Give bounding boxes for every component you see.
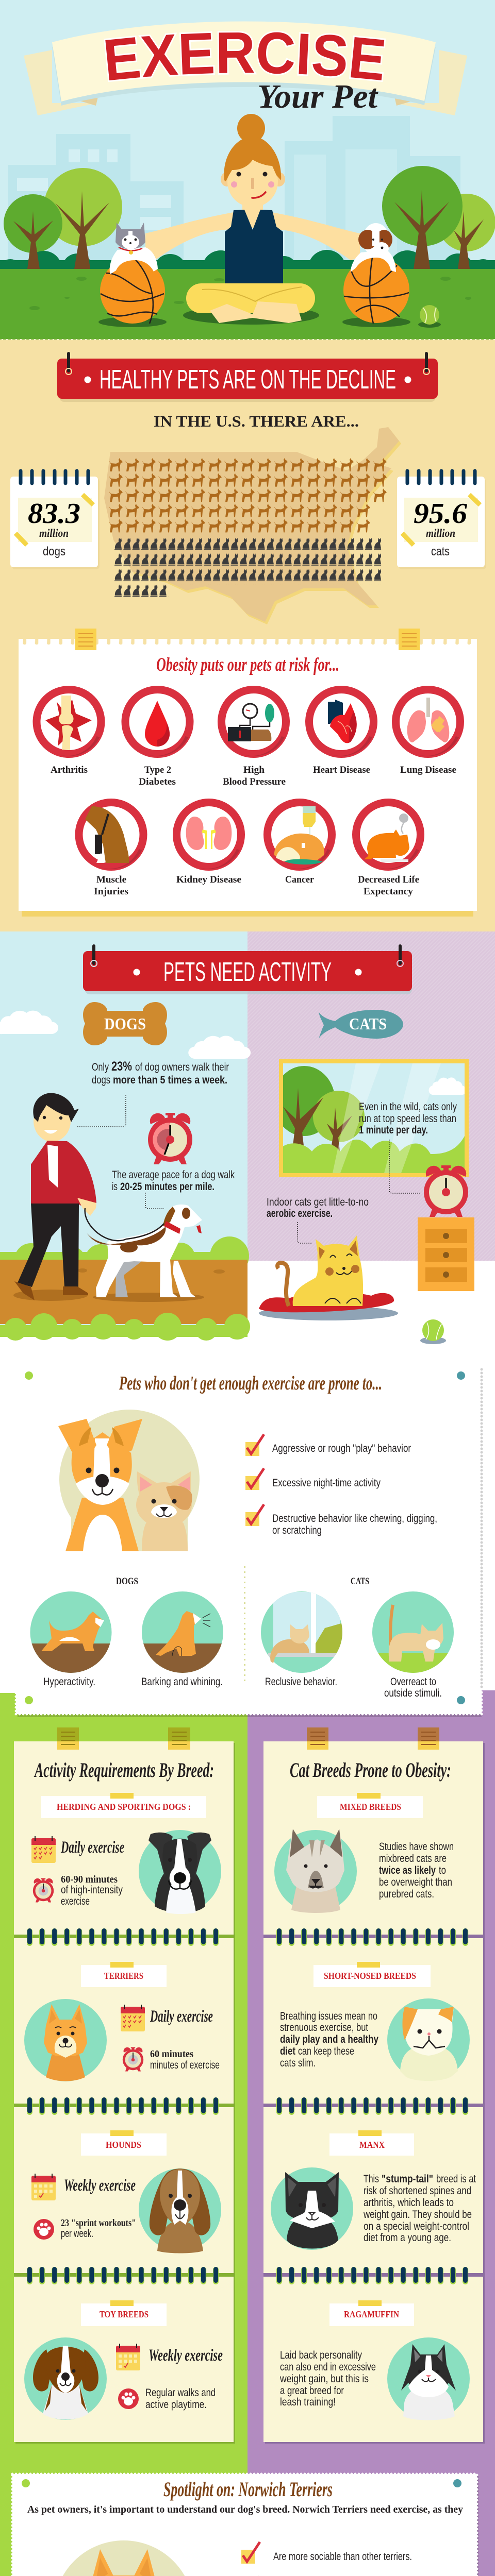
banner: pets need activity: [83, 944, 412, 994]
note: cats count: [397, 471, 486, 569]
trees: [0, 166, 495, 288]
cat pictogram grid: [114, 538, 383, 600]
stat: dog walking: more than 5 times a week.: [113, 1074, 227, 1086]
spiral divider: [263, 2267, 483, 2284]
risk: high blood pressure: Blood Pressure: [223, 776, 286, 787]
risk: decreased life expectancy: Decreased Life: [358, 874, 419, 885]
risk: diabetes: [125, 689, 190, 787]
bone label: dogs: DOGS: [104, 1014, 146, 1033]
stat: walk pace: [112, 1169, 235, 1193]
window with trees: [273, 1061, 467, 1175]
behaviour: overreact: [371, 1591, 456, 1699]
checklist: norwich traits: Are more sociable than other terriers.: [273, 2551, 412, 2563]
behaviour: overreact: outside stimuli.: [384, 1687, 442, 1699]
breed: toy breeds: active playtime.: [145, 2399, 207, 2411]
title: EXERCISE: [104, 31, 386, 82]
walking dog: [85, 1205, 202, 1297]
left basketball with cat: [98, 223, 167, 327]
dog and cat portrait: [58, 1410, 200, 1551]
ground: [0, 269, 495, 339]
heading: IN THE U.S. THERE ARE...: [154, 412, 359, 430]
title: [104, 31, 386, 82]
risk: diabetes: Diabetes: [139, 776, 176, 787]
intro text: As pet owners, it's important to understand our dog's breed. Norwich Terriers need exercise, as they: [27, 2504, 463, 2515]
risk: muscle injuries: [79, 803, 143, 897]
right basketball with dog: [342, 223, 410, 327]
stat: cats in wild: run at top speed less than: [359, 1113, 456, 1125]
breed: short-nosed breeds: cats slim.: [280, 2057, 316, 2069]
spiral divider: [14, 1928, 234, 1946]
breed: mixed breeds: mixbreed cats are: [379, 1853, 447, 1865]
risk: cancer: Cancer: [285, 874, 315, 885]
behaviour: hyperactivity: [30, 1591, 112, 1688]
breed: ragamuffin: weight gain, but this is: [279, 2373, 369, 2385]
breed: ragamuffin: leash training!: [280, 2396, 336, 2408]
checklist: behaviours: Excessive night-time activity: [272, 1477, 381, 1489]
panel heading: Obesity puts our pets at risk for...: [156, 654, 339, 675]
behaviour: barking: Barking and whining.: [141, 1676, 223, 1688]
checklist: behaviours: or scratching: [272, 1524, 322, 1536]
breed: toy breeds: Regular walks and: [145, 2387, 216, 2399]
risk: arthritis: [37, 689, 101, 775]
norwich terrier portrait: [54, 2540, 194, 2576]
spiral divider: [14, 2267, 234, 2284]
risk: heart disease: [309, 689, 373, 775]
risk: kidney disease: [176, 803, 241, 885]
breed: hounds: [31, 2130, 221, 2253]
section: healthy pets: [0, 340, 495, 931]
behaviour: reclusive: Reclusive behavior.: [265, 1676, 337, 1688]
tapes: [307, 1727, 439, 1750]
breed: toy breeds: Weekly exercise: [148, 2346, 223, 2365]
breed: manx: [271, 2130, 476, 2250]
breed: manx: on a special weight-control: [364, 2221, 469, 2232]
breed: manx: diet from a young age.: [364, 2232, 451, 2244]
note: dogs count: [10, 471, 100, 569]
stat: dog walking: dogs: [92, 1074, 110, 1086]
clock: cat speed: [424, 1165, 468, 1217]
section: hero: [0, 0, 495, 340]
breed: short-nosed breeds: diet: [280, 2045, 295, 2057]
note: cats count: cats: [431, 545, 450, 558]
label: cats: CATS: [351, 1576, 369, 1587]
panel: prone behaviours: [16, 1365, 482, 1717]
breed: ragamuffin: a great breed for: [280, 2385, 344, 2397]
breed: ragamuffin: Laid back personality: [280, 2349, 362, 2361]
breed: terriers: minutes of exercise: [150, 2059, 220, 2071]
breed: mixed breeds: purebred cats.: [379, 1888, 434, 1900]
breed: short-nosed breeds: strenuous exercise, but: [280, 2022, 368, 2033]
breed: short-nosed breeds: daily play and a healthy: [280, 2033, 378, 2045]
banner: pets need activity: PETS NEED ACTIVITY: [163, 957, 332, 987]
breed: mixed breeds: be overweight than: [379, 1876, 452, 1888]
clouds: [0, 1011, 251, 1059]
breed: manx: weight gain. They should be: [363, 2209, 472, 2221]
yellow cat on cushion: [259, 1235, 398, 1320]
breed: herding and sporting dogs: exercise: [61, 1895, 90, 1907]
risk: lung disease: [396, 689, 460, 775]
breed: terriers: TERRIERS: [104, 1971, 143, 1981]
section: breed backgrounds: [0, 1690, 495, 2576]
breed: terriers: Daily exercise: [150, 2007, 213, 2026]
breed: herding and sporting dogs: Daily exercise: [60, 1838, 124, 1857]
breed: manx: breed is at: [436, 2173, 476, 2185]
panel: activity requirements by breed: [14, 1727, 235, 2444]
stat: cats in wild: 1 minute per day.: [359, 1124, 428, 1136]
checklist: behaviours: Aggressive or rough "play" behavior: [272, 1443, 411, 1454]
breed: manx: MANX: [359, 2140, 385, 2150]
stat: walk pace: is: [112, 1181, 118, 1193]
stat: dog walking: Only: [92, 1061, 109, 1073]
behaviour: overreact: Overreact to: [390, 1676, 436, 1688]
note: cats count: 95.6: [414, 498, 467, 530]
stat: walk pace: The average pace for a dog walk: [112, 1169, 235, 1181]
risk: decreased life expectancy: [356, 803, 421, 897]
risk: muscle injuries: Muscle: [96, 874, 126, 885]
subtitle: Your Pet: [257, 78, 378, 115]
risk: muscle injuries: Injuries: [94, 886, 128, 897]
dog on ball: [351, 223, 396, 272]
stat: cats in wild: Even in the wild, cats only: [359, 1101, 457, 1113]
panel: cat breeds prone to obesity: [263, 1727, 485, 2444]
tapes: [57, 1727, 190, 1750]
breed: terriers: 60 minutes: [150, 2048, 193, 2060]
breed: herding and sporting dogs: HERDING AND SPORTING DOGS :: [57, 1802, 191, 1812]
label: dogs: DOGS: [116, 1576, 138, 1587]
breed: short-nosed breeds: can keep these: [298, 2045, 354, 2057]
breed: mixed breeds: to: [439, 1865, 446, 1876]
breed: mixed breeds: twice as likely: [379, 1865, 436, 1876]
breed: ragamuffin: RAGAMUFFIN: [344, 2309, 399, 2319]
breed: hounds: per week.: [61, 2228, 93, 2240]
behaviour: barking: [141, 1591, 224, 1688]
woman sitting: [145, 114, 360, 325]
dog pictogram grid: [109, 458, 389, 534]
breed: manx: "stump-tail": [382, 2173, 433, 2185]
breed: mixed breeds: Studies have shown: [379, 1841, 454, 1853]
panel: obesity risks: [19, 629, 477, 917]
breed: mixed breeds: [274, 1793, 454, 1913]
stat: indoor cats: aerobic exercise.: [267, 1208, 333, 1219]
section: pets need activity: [0, 931, 495, 1374]
fish label: cats: [319, 1010, 403, 1039]
panel: spotlight on norwich terriers: [12, 2474, 478, 2576]
spiral divider: [14, 2097, 234, 2115]
fish label: cats: CATS: [349, 1014, 387, 1033]
behaviour: hyperactivity: Hyperactivity.: [43, 1676, 95, 1688]
man walking dog: [14, 1093, 96, 1300]
checklist: behaviours: Destructive behavior like chewing, digging,: [272, 1513, 437, 1524]
risk: diabetes: Type 2: [144, 765, 171, 775]
breed: terriers: [24, 1962, 220, 2081]
stat: indoor cats: [267, 1196, 369, 1219]
breed: herding and sporting dogs: of high-intensity: [61, 1884, 123, 1896]
stat: cats in wild: [359, 1101, 457, 1136]
tennis ball: [420, 1319, 446, 1344]
breed: manx: arthritis, which leads to: [364, 2197, 454, 2209]
map of the US: [104, 427, 401, 624]
breed: short-nosed breeds: [280, 1962, 470, 2081]
breed: hounds: HOUNDS: [106, 2140, 141, 2150]
ground: dog side: [0, 1236, 250, 1341]
spiral divider: [263, 2097, 483, 2115]
breed: mixed breeds: MIXED BREEDS: [340, 1802, 401, 1812]
breed: herding and sporting dogs: [31, 1793, 221, 1914]
panel heading: Spotlight on: Norwich Terriers: [163, 2478, 333, 2501]
tennis ball: [418, 305, 441, 328]
risk: kidney disease: Kidney Disease: [176, 874, 241, 885]
breed: hounds: 23 "sprint workouts": [61, 2217, 136, 2229]
dresser: [418, 1217, 474, 1291]
breed: toy breeds: TOY BREEDS: [100, 2309, 148, 2319]
stat: walk pace: 20-25 minutes per mile.: [120, 1181, 214, 1193]
risk: heart disease: Heart Disease: [313, 765, 370, 775]
risk: lung disease: Lung Disease: [400, 765, 456, 775]
behaviour: reclusive: [261, 1591, 343, 1688]
breed: manx: risk of shortened spines and: [364, 2185, 471, 2197]
risk: arthritis: Arthritis: [51, 765, 88, 775]
panel heading: Activity Requirements By Breed:: [34, 1758, 214, 1782]
breed: short-nosed breeds: Breathing issues mean no: [280, 2010, 377, 2022]
city skyline: [8, 116, 460, 269]
breed: short-nosed breeds: SHORT-NOSED BREEDS: [324, 1971, 416, 1981]
clock: dog pace: [148, 1113, 192, 1164]
risk: cancer: [267, 803, 332, 885]
stat: dog walking: of dog owners walk their: [135, 1061, 229, 1073]
breed: ragamuffin: [279, 2300, 470, 2420]
checklist: norwich traits: [241, 2542, 444, 2576]
stat: dog walking: 23%: [111, 1059, 132, 1074]
note: cats count: million: [426, 527, 455, 539]
breed: hounds: Weekly exercise: [64, 2176, 136, 2195]
breed: ragamuffin: can also end in excessive: [280, 2361, 376, 2373]
risk: decreased life expectancy: Expectancy: [364, 886, 414, 897]
stat: indoor cats: Indoor cats get little-to-no: [267, 1196, 369, 1208]
breed: toy breeds: [24, 2300, 223, 2420]
cat on ball: [110, 223, 158, 274]
bone label: dogs: [83, 1002, 167, 1045]
risk: high blood pressure: High: [243, 765, 265, 775]
note: dogs count: dogs: [43, 545, 65, 558]
banner: healthy pets: [57, 352, 438, 402]
spiral divider: [263, 1928, 483, 1946]
note: dogs count: 83.3: [28, 498, 80, 530]
stat: dog walking: [92, 1059, 229, 1086]
breed: herding and sporting dogs: 60-90 minutes: [61, 1874, 118, 1885]
checklist: behaviours: [245, 1434, 437, 1536]
risk: high blood pressure: [222, 689, 286, 787]
ribbon banner: [24, 22, 467, 115]
breed: manx: This: [364, 2173, 379, 2185]
note: dogs count: million: [39, 527, 69, 539]
